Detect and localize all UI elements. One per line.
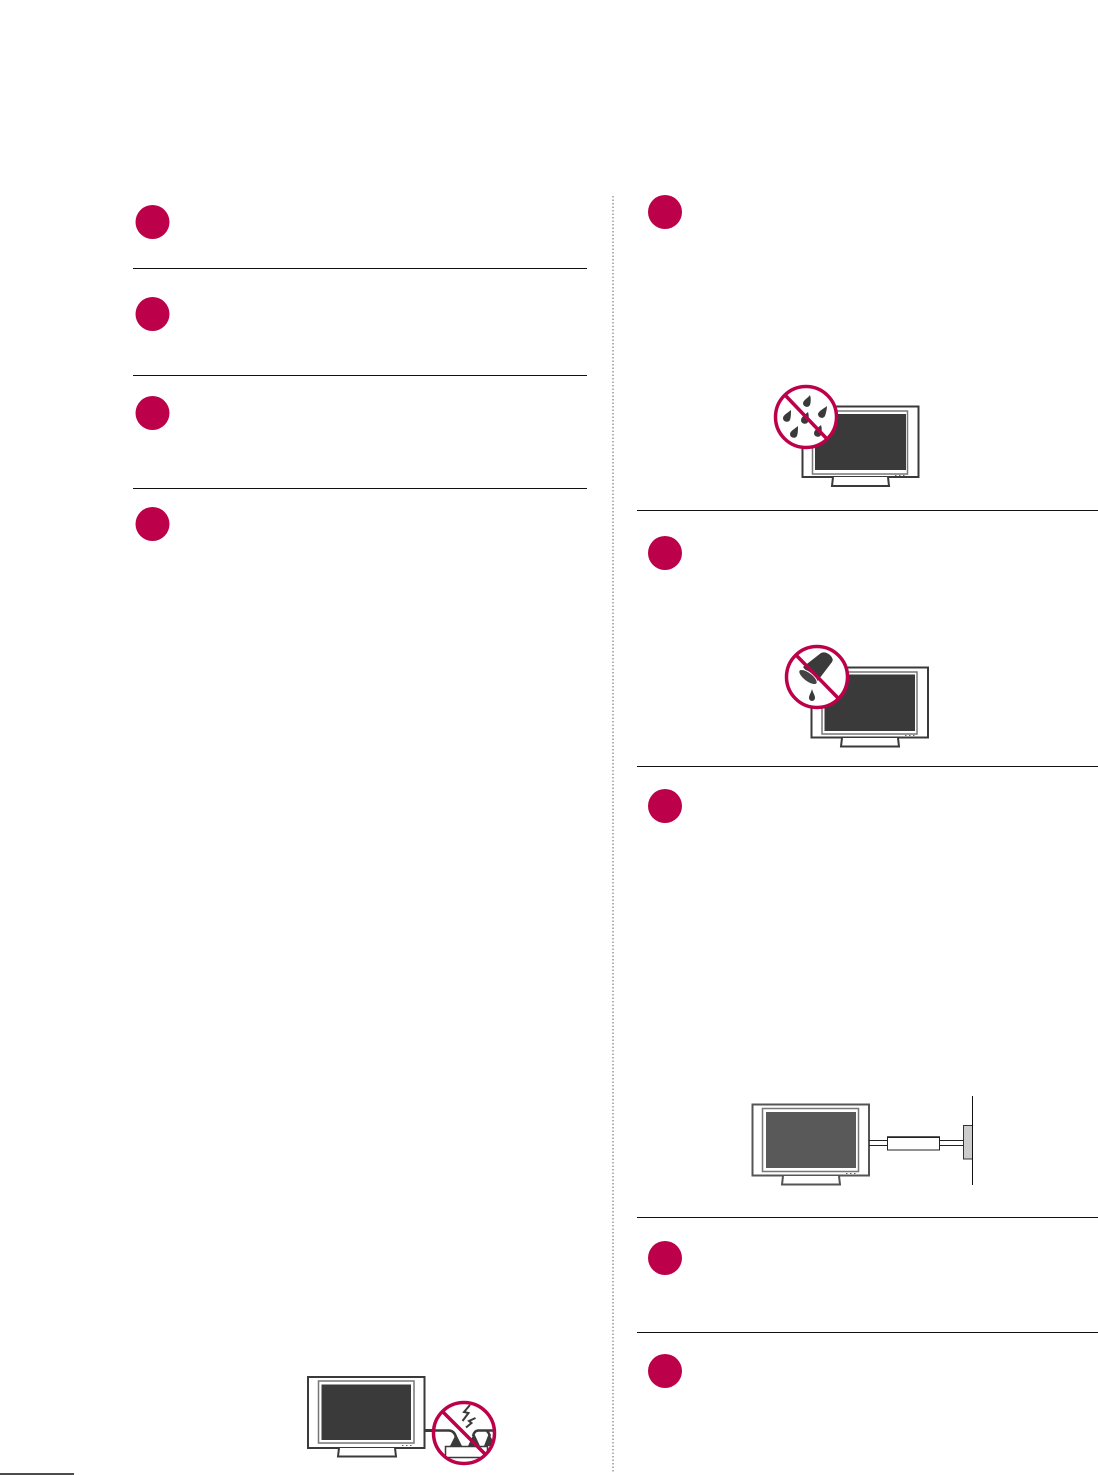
bullet circle: right 5 [648, 1354, 682, 1388]
bullet circle: right 1 [648, 195, 682, 229]
icon: TV with no water drops [776, 386, 918, 486]
icon: TV with no spilled liquid [786, 646, 928, 746]
bullet circle: left 4 [136, 507, 170, 541]
bullet circle: left 1 [136, 205, 170, 239]
bullet circle: right 3 [648, 789, 682, 823]
bullet circle: left 2 [136, 297, 170, 331]
icon: TV grounded to wall [752, 1096, 972, 1185]
bullet circle: right 2 [648, 536, 682, 570]
icon: TV with no overloaded outlet [308, 1377, 495, 1464]
bullet circle: left 3 [136, 396, 170, 430]
bullet circle: right 4 [648, 1241, 682, 1275]
